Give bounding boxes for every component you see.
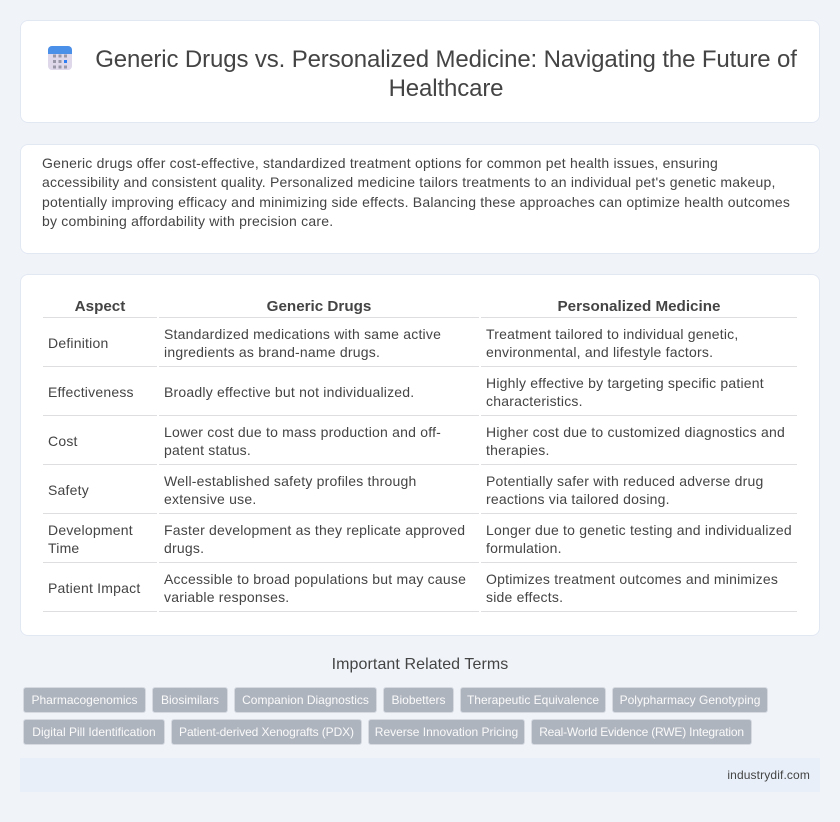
row: patient impact: Optimizes treatment outcomes and minimizes	[486, 571, 778, 587]
row: patient impact: side effects.	[486, 589, 563, 605]
tag	[612, 687, 768, 713]
tag: Biobetters	[391, 693, 446, 707]
row: development time: Development	[48, 522, 133, 538]
panel: title card	[20, 20, 820, 123]
title: Generic Drugs vs. Personalized Medicine: Navigating the Future of Healthcare	[95, 46, 797, 102]
row: effectiveness: Highly effective by targeting specific patient	[486, 375, 764, 391]
row: development time: drugs.	[164, 540, 204, 556]
row: safety	[48, 473, 764, 507]
row: effectiveness: Broadly effective but not individualized.	[164, 384, 414, 400]
table header	[75, 298, 720, 315]
row: effectiveness	[48, 375, 764, 409]
row: definition: Definition	[48, 335, 108, 351]
table header: Personalized Medicine	[558, 298, 720, 315]
row: cost: therapies.	[486, 442, 550, 458]
row: cost: Cost	[48, 433, 78, 449]
tag: Polypharmacy Genotyping	[620, 693, 760, 707]
intro text: Generic drugs offer cost-effective, standardized treatment options for common pet health issues, ensuring	[42, 155, 718, 171]
tag	[383, 687, 454, 713]
row: safety: extensive use.	[164, 491, 256, 507]
tag: Digital Pill Identification	[32, 725, 156, 739]
row: definition: Standardized medications with same active	[164, 326, 441, 342]
row: patient impact	[48, 571, 778, 605]
tag: Reverse Innovation Pricing	[375, 725, 518, 739]
row: cost: patent status.	[164, 442, 251, 458]
row: patient impact: Patient Impact	[48, 580, 140, 596]
row: effectiveness: characteristics.	[486, 393, 583, 409]
row: cost: Lower cost due to mass production and off-	[164, 424, 441, 440]
tag	[23, 719, 165, 745]
row: safety: Safety	[48, 482, 89, 498]
tag	[460, 687, 606, 713]
tag	[23, 687, 146, 713]
tag	[531, 719, 752, 745]
row: development time: formulation.	[486, 540, 562, 556]
row: safety: Well-established safety profiles through	[164, 473, 416, 489]
row: development time: Longer due to genetic testing and individualized	[486, 522, 792, 538]
row: definition: ingredients as brand-name drugs.	[164, 344, 380, 360]
intro text	[42, 155, 790, 229]
intro text: by combining affordability with precision care.	[42, 213, 333, 229]
row: definition	[48, 326, 738, 360]
comparison table	[43, 298, 797, 612]
tag: Patient-derived Xenografts (PDX)	[179, 725, 354, 739]
tag	[234, 687, 377, 713]
panel: introduction	[20, 144, 820, 254]
row: safety: Potentially safer with reduced adverse drug	[486, 473, 764, 489]
footer bar	[20, 758, 820, 792]
table header: Generic Drugs	[267, 298, 371, 315]
row: definition: environmental, and lifestyle factors.	[486, 344, 713, 360]
intro text: accessibility and consistent quality. Personalized medicine tailors treatments to an individual pet's genetic makeup,	[42, 174, 776, 190]
row: cost	[48, 424, 785, 458]
row: definition: Treatment tailored to individual genetic,	[486, 326, 738, 342]
related term tags	[23, 687, 768, 745]
tag: Biosimilars	[161, 693, 219, 707]
row: effectiveness: Effectiveness	[48, 384, 134, 400]
row: cost: Higher cost due to customized diagnostics and	[486, 424, 785, 440]
tag: Therapeutic Equivalence	[467, 693, 599, 707]
tag	[152, 687, 228, 713]
tag	[171, 719, 362, 745]
row: safety: reactions via tailored dosing.	[486, 491, 670, 507]
footer source: industrydif.com	[727, 768, 810, 782]
icon: calendar	[48, 46, 72, 70]
row: patient impact: variable responses.	[164, 589, 289, 605]
row: development time: Faster development as they replicate approved	[164, 522, 465, 538]
tag: Companion Diagnostics	[242, 693, 369, 707]
row: development time: Time	[48, 540, 79, 556]
row: patient impact: Accessible to broad populations but may cause	[164, 571, 466, 587]
row: development time	[48, 522, 792, 556]
tag	[368, 719, 525, 745]
tag: Real-World Evidence (RWE) Integration	[539, 725, 744, 739]
panel: comparison table	[20, 274, 820, 636]
table header: Aspect	[75, 298, 125, 315]
heading: related terms: Important Related Terms	[332, 656, 508, 673]
intro text: potentially improving efficacy and minimizing side effects. Balancing these approaches can optimize health outcomes	[42, 194, 790, 210]
tag: Pharmacogenomics	[31, 693, 138, 707]
